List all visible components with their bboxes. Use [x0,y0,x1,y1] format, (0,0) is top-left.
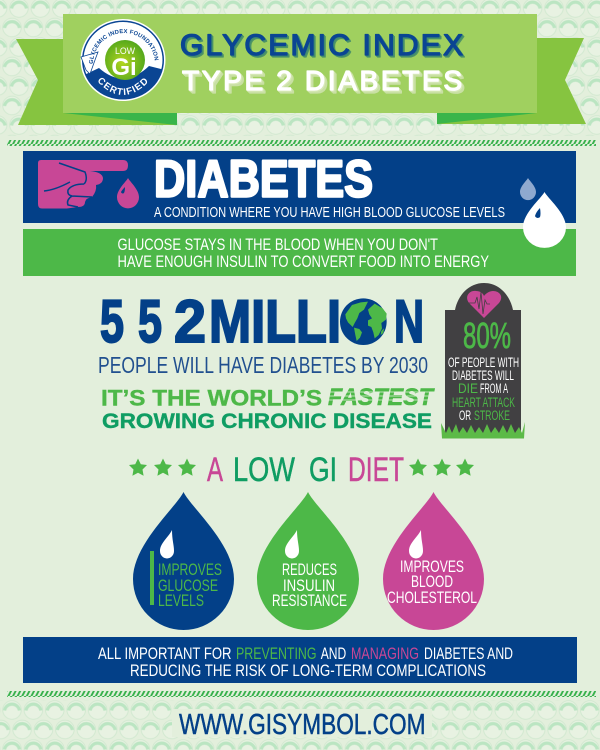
panel: tombstone 80 percent: DIABETES WILL [452,368,514,383]
panel: tombstone 80 percent: FROM A [480,381,508,396]
icon: heart [467,291,501,318]
panel: closing statement [23,637,577,683]
drop: improves blood cholesterol: BLOOD [411,573,453,591]
title line 2: TYPE 2 DIABETES [182,65,462,96]
drop: improves blood cholesterol: IMPROVES [400,558,464,576]
heading: a low gi diet: GI [309,451,337,489]
footer pattern [0,700,600,750]
icon: pointing hand [38,160,128,208]
drop: reduces insulin resistance [257,492,359,630]
grass [441,422,525,438]
drop: improves glucose levels: IMPROVES [158,561,222,579]
drop: improves blood cholesterol: CHOLESTEROL [387,589,477,607]
statistic: 552 million [100,288,424,355]
statistic: 552 million: 5 [100,288,124,355]
text: fastest growing chronic disease: GROWING CHRONIC DISEASE [102,409,432,433]
logo: Low GI certified: LOW [115,46,135,56]
title ribbon [16,14,586,125]
panel: closing statement: AND [321,645,346,663]
panel: closing statement: DIABETES AND [424,645,513,663]
panel: tombstone 80 percent: DIE [458,381,478,396]
text: fastest growing chronic disease [101,384,436,433]
drop: improves glucose levels: LEVELS [158,592,204,610]
heading: a low gi diet: A [207,451,223,489]
panel: tombstone 80 percent: OR [459,408,471,423]
heading: a low gi diet: DIET [348,451,404,489]
panel: glucose explanation [23,229,576,276]
statistic: 552 million: MILLI [209,288,341,355]
logo: Low GI certified [80,19,166,101]
drop: reduces insulin resistance: RESISTANCE [272,592,347,610]
panel: tombstone 80 percent: HEART ATTACK [452,395,515,410]
panel: tombstone 80 percent: STROKE [474,408,510,423]
drop: improves blood cholesterol [383,492,484,630]
title line 1: GLYCEMIC INDEX [180,29,463,62]
website url: WWW.GISYMBOL.COM [179,709,426,741]
panel: glucose explanation: GLUCOSE STAYS IN THE BLOOD WHEN YOU DON'T [118,236,438,254]
logo: Low GI certified: CERTIFIED [98,78,148,95]
stars left [129,458,196,476]
icon: light blue drop [520,178,536,200]
logo: Low GI certified: Gi [111,54,137,81]
heading: a low gi diet: LOW [233,451,295,489]
heading: a low gi diet [129,451,474,489]
panel: glucose explanation: HAVE ENOUGH INSULIN TO CONVERT FOOD INTO ENERGY [118,253,489,271]
statistic: 552 million: 2 [174,288,206,355]
panel: tombstone 80 percent [441,283,525,438]
icon: pink drop [117,178,139,208]
stars right [409,458,474,476]
statistic: 552 million: 5 [138,288,162,355]
panel: closing statement: ALL IMPORTANT FOR [98,645,232,663]
panel: tombstone 80 percent: 80% [463,315,511,356]
panel: diabetes definition [23,150,576,223]
heading: DIABETES [154,150,373,208]
text: people will have diabetes by 2030: PEOPLE WILL HAVE DIABETES BY 2030 [98,352,428,378]
text: fastest growing chronic disease: IT’S THE WORLD’S [101,386,322,410]
divider [7,140,596,146]
drop: reduces insulin resistance: INSULIN [283,577,335,595]
divider [7,691,596,697]
drop: reduces insulin resistance: REDUCES [282,561,337,579]
drop: improves glucose levels: GLUCOSE [158,577,218,595]
panel: tombstone 80 percent: OF PEOPLE WITH [448,355,519,370]
header pattern [0,0,600,136]
panel: closing statement: PREVENTING [236,645,316,663]
statistic: 552 million: N [394,288,424,355]
panel: closing statement: MANAGING [351,645,419,663]
word: fastest: FASTEST [328,384,435,411]
logo: Low GI certified: GLYCEMIC INDEX FOUNDATION [89,29,159,64]
icon: globe [340,298,387,345]
icon: white drop [523,192,566,248]
drop: improves glucose levels [133,492,234,630]
panel: closing statement: REDUCING THE RISK OF LONG-TERM COMPLICATIONS [130,662,486,680]
